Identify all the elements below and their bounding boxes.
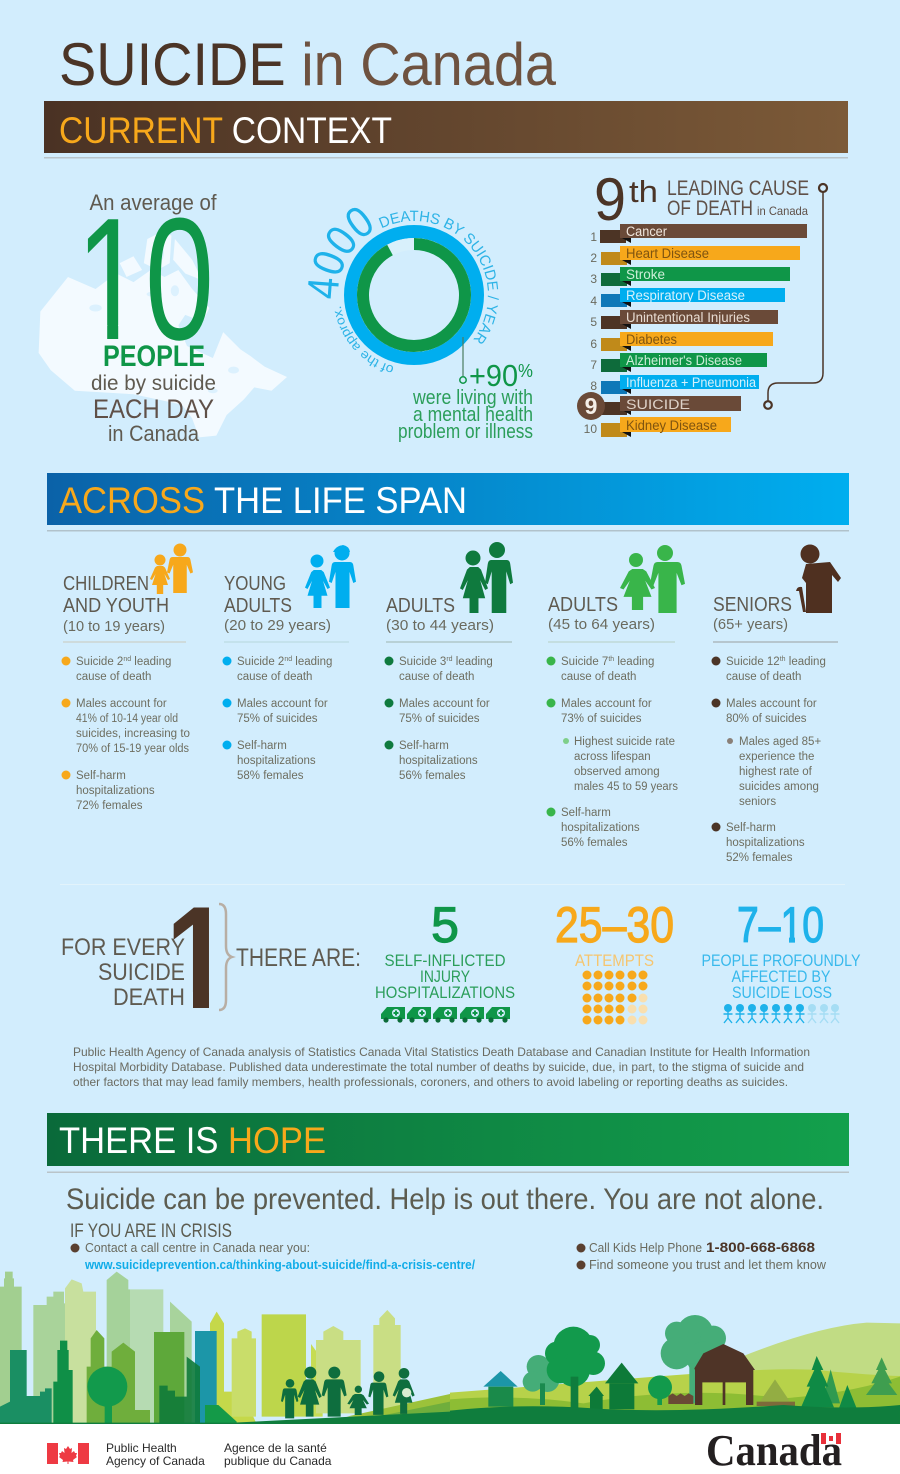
stat: 5 hospitalizations: SELF-INFLICTED: [384, 951, 506, 970]
footnote: other factors that may lead family members, health professionals, coroners, and others to avoid labeling or reporting deaths as suicides.: [73, 1075, 788, 1089]
bullet list: 58% females: [237, 770, 304, 782]
bullet list: hospitalizations: [399, 755, 478, 767]
stat +90%: +90: [469, 358, 522, 393]
bullet list: th: [608, 656, 614, 663]
bullet list: Males account for: [726, 698, 817, 710]
stat: 5 hospitalizations: [375, 897, 515, 1023]
footnote: Hospital Morbidity Database. Published data underestimate the total number of deaths by suicide, due, in part, to the stigma of suicide and: [73, 1060, 804, 1074]
barn: [694, 1344, 755, 1405]
bar 10 kidney disease: [584, 417, 731, 437]
heading: (20 to 29 years): [224, 618, 331, 634]
bullet list: Self-harm: [399, 740, 449, 752]
stat: 25-30 attempts: [555, 897, 674, 1024]
stat +90%: %: [518, 361, 533, 381]
icon: children: [150, 544, 193, 594]
bullet list: 75% of suicides: [237, 713, 318, 725]
panel: if you are in crisis: www.suicideprevention.ca/thinking-about-suicide/find-a-crisis-centre/: [84, 1257, 475, 1272]
bullet list: Suicide 7: [561, 656, 608, 668]
footnote: Public Health Agency of Canada analysis of Statistics Canada Vital Statistics Death Database and Canadian Institute for Health Information: [73, 1045, 810, 1059]
bullet list: males 45 to 59 years: [574, 781, 678, 793]
heading: [594, 166, 809, 233]
house: [588, 1387, 604, 1409]
panel: if you are in crisis: [70, 1221, 475, 1272]
text: Public Health Agency of Canada: [106, 1441, 205, 1468]
bar 9 suicide: [577, 392, 741, 420]
bar 9 suicide: SUICIDE: [626, 397, 690, 412]
panel: adults 45 to 64: [546, 545, 685, 849]
panel: if you are in crisis: IF YOU ARE IN CRISIS: [70, 1221, 232, 1242]
text: in Canada: in Canada: [108, 421, 200, 446]
bullet list: nd: [123, 656, 131, 663]
icon: young adults: [305, 545, 356, 608]
bar 2 heart disease: 2: [590, 251, 597, 265]
bar 8 influenza and pneumonia: Influenza + Pneumonia: [626, 375, 756, 390]
bullet list: nd: [284, 656, 292, 663]
heading: [548, 594, 655, 633]
heading: (45 to 64 years): [548, 617, 655, 633]
stat: 5 hospitalizations: INJURY: [420, 967, 470, 986]
icon: adults: [620, 545, 685, 613]
panel: if you are in crisis: Contact a call centre in Canada near you:: [85, 1240, 310, 1255]
panel: young adults: [222, 545, 356, 782]
text: for every suicide death: FOR EVERY: [61, 934, 185, 961]
panel: adults 30 to 44: [384, 542, 513, 782]
stat: 5 hospitalizations: 5: [431, 897, 459, 953]
bullet list: cause of death: [399, 671, 474, 683]
heading: ADULTS: [548, 594, 618, 616]
bar 8 influenza and pneumonia: 8: [590, 379, 597, 393]
bracket: [219, 904, 232, 1010]
panel: donut chart 4000 deaths: [308, 208, 533, 443]
bullet list: [712, 656, 826, 864]
bullet list: leading: [131, 656, 171, 668]
bullet list: leading: [292, 656, 332, 668]
panel: children and youth: [62, 544, 193, 812]
number 10: 10: [76, 181, 214, 376]
bar 4 respiratory disease: Respiratory Disease: [626, 288, 745, 303]
bullet list: 56% females: [399, 770, 466, 782]
stat: 7-10 people affected: [702, 897, 860, 1023]
heading: CHILDREN: [63, 573, 149, 595]
footer: [0, 1424, 900, 1474]
bar 2 heart disease: Heart Disease: [626, 246, 709, 261]
illustration: family: [281, 1367, 415, 1418]
bullet list: suicides among: [739, 781, 819, 793]
bar 2 heart disease: [590, 246, 800, 265]
bar 6 diabetes: Diabetes: [626, 332, 677, 347]
heading: OF DEATH: [667, 197, 753, 220]
text: living with mental health problem: [398, 387, 533, 443]
bullet list: highest rate of: [739, 766, 813, 778]
stat: 7-10 people affected: SUICIDE LOSS: [732, 983, 832, 1002]
bullet list: cause of death: [561, 671, 636, 683]
bullet list: rd: [446, 656, 453, 663]
curved label of the approx: of the approx.: [334, 306, 393, 372]
heading: SENIORS: [713, 594, 792, 616]
text: there are: THERE ARE:: [236, 944, 361, 972]
bullet list: 75% of suicides: [399, 713, 480, 725]
banner: there is hope: THERE IS HOPE: [59, 1120, 326, 1161]
panel: for every suicide death: [62, 902, 360, 1012]
hay: [757, 1379, 795, 1406]
title: SUICIDE in Canada: [59, 31, 557, 98]
bullet list: Highest suicide rate: [574, 736, 675, 748]
text: each day: EACH DAY: [93, 394, 214, 424]
bullet list: 56% females: [561, 837, 628, 849]
spruce trees: [801, 1356, 897, 1410]
panel: other help: Find someone you trust and let them know: [589, 1257, 827, 1272]
bullet list: across lifespan: [574, 751, 651, 763]
text: Public Health Agency of Canada: Public Health: [106, 1441, 177, 1455]
bullet list: [62, 656, 190, 812]
banner: current context: CURRENT CONTEXT: [59, 110, 392, 151]
bar 4 respiratory disease: 4: [590, 294, 597, 308]
bullet list: hospitalizations: [76, 785, 155, 797]
bullet list: cause of death: [237, 671, 312, 683]
stat: 25-30 attempts: 25–30: [555, 897, 674, 953]
heading: ADULTS: [224, 595, 292, 617]
bullet list: Suicide 12: [726, 656, 780, 668]
bullet list: hospitalizations: [561, 822, 640, 834]
bullet list: 52% females: [726, 852, 793, 864]
icon: ambulances: [381, 1007, 510, 1023]
bullet list: 80% of suicides: [726, 713, 807, 725]
map of Canada: [39, 232, 287, 437]
icon: adults: [460, 542, 513, 613]
stat: 7-10 people affected: 7–10: [737, 897, 824, 953]
panel: 9th leading cause of death: [577, 166, 827, 437]
bar 4 respiratory disease: [590, 288, 785, 308]
bar 7 alzheimer's disease: 7: [590, 358, 597, 372]
bar 6 diabetes: 6: [590, 337, 597, 351]
bar 3 stroke: [590, 267, 790, 286]
heading: th: [629, 174, 658, 209]
tree: [545, 1327, 605, 1408]
text: living with mental health problem: a mental health: [413, 404, 533, 426]
bullet list: Suicide 2: [237, 656, 284, 668]
bar 10 kidney disease: Kidney Disease: [626, 418, 717, 433]
bar 6 diabetes: [590, 332, 773, 351]
heading: AND YOUTH: [63, 595, 169, 617]
footnote: [73, 1045, 810, 1089]
text: Agence de la santé publique du Canada: publique du Canada: [224, 1454, 332, 1468]
bullet list: hospitalizations: [237, 755, 316, 767]
bullet list: Self-harm: [237, 740, 287, 752]
heading: [224, 573, 331, 634]
stat: 7-10 people affected: PEOPLE PROFOUNDLY: [702, 951, 860, 970]
bullet list: 72% females: [76, 800, 143, 812]
panel: seniors: [712, 544, 841, 864]
heading: YOUNG: [224, 573, 286, 595]
text: an average of: An average of: [90, 190, 217, 215]
stat: 5 hospitalizations: HOSPITALIZATIONS: [375, 983, 515, 1002]
number 1: 1: [166, 877, 231, 1040]
panel: other help: 1-800-668-6868: [706, 1239, 815, 1255]
logo: Canada wordmark: Canada: [706, 1426, 842, 1474]
panel: ten people per day: [39, 181, 287, 446]
bar 7 alzheimer's disease: Alzheimer's Disease: [626, 353, 742, 368]
heading: (10 to 19 years): [63, 619, 165, 635]
text: for every suicide death: [61, 934, 185, 1011]
bullet list: cause of death: [76, 671, 151, 683]
text: for every suicide death: SUICIDE: [98, 959, 185, 986]
bullet list: observed among: [574, 766, 660, 778]
tree: [661, 1315, 726, 1403]
heading: [63, 573, 169, 635]
heading: in Canada: [757, 204, 808, 218]
bullet list: 73% of suicides: [561, 713, 642, 725]
text: people: PEOPLE: [103, 340, 205, 373]
bullet list: Males account for: [76, 698, 167, 710]
icon: senior with cane: [796, 544, 841, 613]
text: living with mental health problem: were living with: [412, 387, 533, 409]
connector line: [764, 184, 827, 409]
icon: federal flag: [47, 1443, 89, 1464]
bullet list: Self-harm: [726, 822, 776, 834]
bullet list: 41% of 10-14 year old: [76, 713, 178, 725]
bullet list: [222, 656, 332, 782]
heading: (65+ years): [713, 617, 788, 633]
donut ring: [350, 232, 478, 358]
bullet list: 70% of 15-19 year olds: [76, 743, 189, 755]
curved label deaths by suicide: DEATHS BY SUICIDE / YEAR: [378, 210, 499, 344]
banner: across the life span: ACROSS THE LIFE SPAN: [59, 480, 467, 521]
bar 8 influenza and pneumonia: [590, 375, 759, 394]
illustration: countryside: [450, 1315, 900, 1424]
bar 1 cancer: [590, 224, 807, 244]
stat: 25-30 attempts: ATTEMPTS: [575, 951, 654, 970]
banner: current context: [44, 101, 848, 153]
dot grid: [582, 970, 648, 1024]
heading: LEADING CAUSE: [667, 177, 809, 200]
bullet list: leading: [786, 656, 826, 668]
bullet list: hospitalizations: [726, 837, 805, 849]
house: [605, 1363, 638, 1409]
heading: [713, 594, 792, 633]
house: [483, 1371, 518, 1407]
connector: [462, 337, 464, 376]
illustration: city skyline: [0, 1272, 450, 1424]
heading: [386, 595, 494, 634]
bullet list: Suicide 2: [76, 656, 123, 668]
bullet list: Males aged 85+: [739, 736, 821, 748]
bar 3 stroke: Stroke: [626, 267, 665, 282]
fence: [668, 1393, 693, 1404]
icon: people row: [724, 1004, 840, 1023]
bar 9 suicide: 9: [585, 393, 597, 419]
bullet list: leading: [614, 656, 654, 668]
text: Public Health Agency of Canada: Agency of Canada: [106, 1454, 205, 1468]
text: suicide can be prevented: Suicide can be prevented. Help is out there. You are not alone.: [66, 1183, 824, 1216]
banner: there is hope: [47, 1113, 849, 1166]
bullet list: seniors: [739, 796, 776, 808]
heading: ADULTS: [386, 595, 455, 617]
bar 5 unintentional injuries: 5: [590, 315, 597, 329]
bullet list: leading: [453, 656, 493, 668]
bullet list: th: [780, 656, 786, 663]
bullet list: Suicide 3: [399, 656, 446, 668]
bar 5 unintentional injuries: [590, 310, 778, 329]
bullet list: Self-harm: [561, 807, 611, 819]
bullet list: experience the: [739, 751, 814, 763]
bullet list: Males account for: [237, 698, 328, 710]
panel: other help: [576, 1239, 827, 1272]
bullet list: suicides, increasing to: [76, 728, 190, 740]
banner: across the life span: [47, 473, 849, 525]
bullet list: Self-harm: [76, 770, 126, 782]
bullet list: [384, 656, 493, 782]
heading: 9: [594, 166, 626, 233]
heading: (30 to 44 years): [386, 618, 494, 634]
text: for every suicide death: DEATH: [113, 984, 185, 1011]
curved label 4000: 4000: [308, 208, 372, 298]
text: living with mental health problem: problem or illness: [398, 421, 533, 443]
bar 10 kidney disease: 10: [584, 422, 597, 436]
stat: 7-10 people affected: AFFECTED BY: [732, 967, 830, 986]
bar 1 cancer: 1: [590, 230, 597, 244]
text: Agence de la santé publique du Canada: Agence de la santé: [224, 1441, 327, 1455]
bullet list: [546, 656, 678, 849]
tree: [523, 1355, 559, 1405]
text: die by suicide: die by suicide: [91, 372, 216, 395]
bar 5 unintentional injuries: Unintentional Injuries: [626, 310, 750, 325]
bar 1 cancer: Cancer: [626, 224, 667, 239]
bullet list: Males account for: [561, 698, 652, 710]
panel: other help: Call Kids Help Phone: [589, 1240, 702, 1255]
bar 7 alzheimer's disease: [590, 353, 767, 372]
text: Agence de la santé publique du Canada: [224, 1441, 332, 1468]
tree: [648, 1375, 672, 1405]
bullet list: cause of death: [726, 671, 801, 683]
bar 3 stroke: 3: [590, 272, 597, 286]
bullet list: Males account for: [399, 698, 490, 710]
